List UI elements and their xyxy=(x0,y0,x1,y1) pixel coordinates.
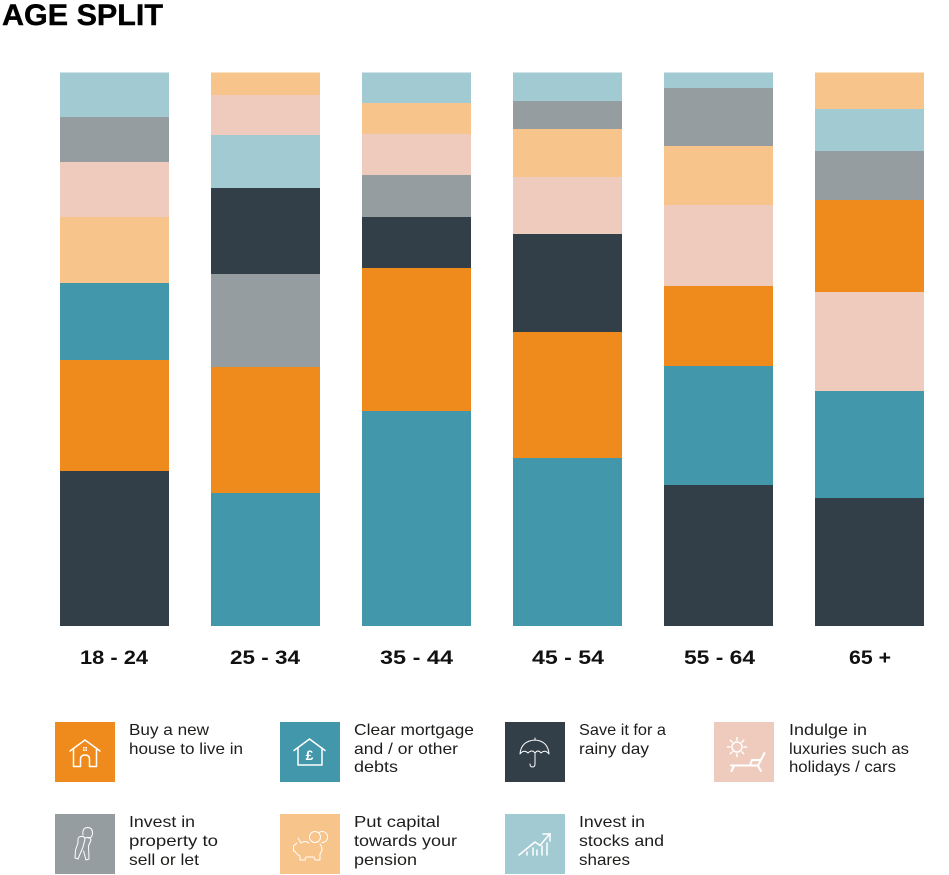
label: Indulge in xyxy=(789,722,867,739)
bar: 25 - 34 xyxy=(211,72,320,626)
label xyxy=(789,722,909,776)
axis labels: 18 - 24 xyxy=(80,648,148,669)
legend item: invest in property xyxy=(55,814,218,874)
label: house to live in xyxy=(129,741,243,758)
label: sell or let xyxy=(129,852,200,869)
label xyxy=(129,722,243,758)
legend item: save for a rainy day xyxy=(505,722,666,782)
label: shares xyxy=(579,852,630,869)
axis labels: 65 + xyxy=(849,648,891,669)
bar: 45 - 54 xyxy=(513,72,622,626)
label: stocks and xyxy=(579,833,664,850)
bar: 65 + xyxy=(815,72,924,626)
label: rainy day xyxy=(579,741,649,758)
icon: umbrella xyxy=(520,738,549,767)
label xyxy=(579,814,664,869)
axis labels: 35 - 44 xyxy=(380,648,454,669)
icon: sun and lounger xyxy=(728,738,764,771)
legend item: clear mortgage xyxy=(280,722,474,782)
legend item: buy a new house xyxy=(55,722,243,782)
icon: rising chart xyxy=(519,834,550,855)
icon: piggy bank with coins xyxy=(294,832,328,860)
icon: house with pound sign xyxy=(294,739,325,765)
label xyxy=(129,814,218,869)
icon: keys xyxy=(75,828,93,860)
bar: 18 - 24 xyxy=(60,72,169,626)
legend item: put capital towards pension xyxy=(280,814,458,874)
label: Clear mortgage xyxy=(354,722,474,739)
bar: 35 - 44 xyxy=(362,72,471,626)
icon: house with pound sign: £ xyxy=(306,747,314,763)
label: property to xyxy=(129,833,218,850)
label: Invest in xyxy=(579,814,645,831)
legend item: indulge in luxuries xyxy=(714,722,909,782)
label: and / or other xyxy=(354,741,459,758)
label: debts xyxy=(354,759,398,776)
label xyxy=(354,722,474,776)
icon: house xyxy=(70,740,100,766)
axis labels: 45 - 54 xyxy=(532,648,605,669)
bar: 55 - 64 xyxy=(664,72,773,626)
label: Put capital xyxy=(354,814,440,831)
label: holidays / cars xyxy=(789,759,896,776)
label xyxy=(579,722,666,758)
label: luxuries such as xyxy=(789,741,909,758)
label: Buy a new xyxy=(129,722,209,739)
axis labels: 55 - 64 xyxy=(684,648,756,669)
label xyxy=(354,814,458,869)
label: towards your xyxy=(354,833,458,850)
axis labels xyxy=(80,648,891,669)
axis labels: 25 - 34 xyxy=(230,648,301,669)
label: Save it for a xyxy=(579,722,666,739)
stacked bar chart xyxy=(60,72,924,626)
label: pension xyxy=(354,852,417,869)
label: Invest in xyxy=(129,814,195,831)
legend item: invest in stocks and shares xyxy=(505,814,664,874)
